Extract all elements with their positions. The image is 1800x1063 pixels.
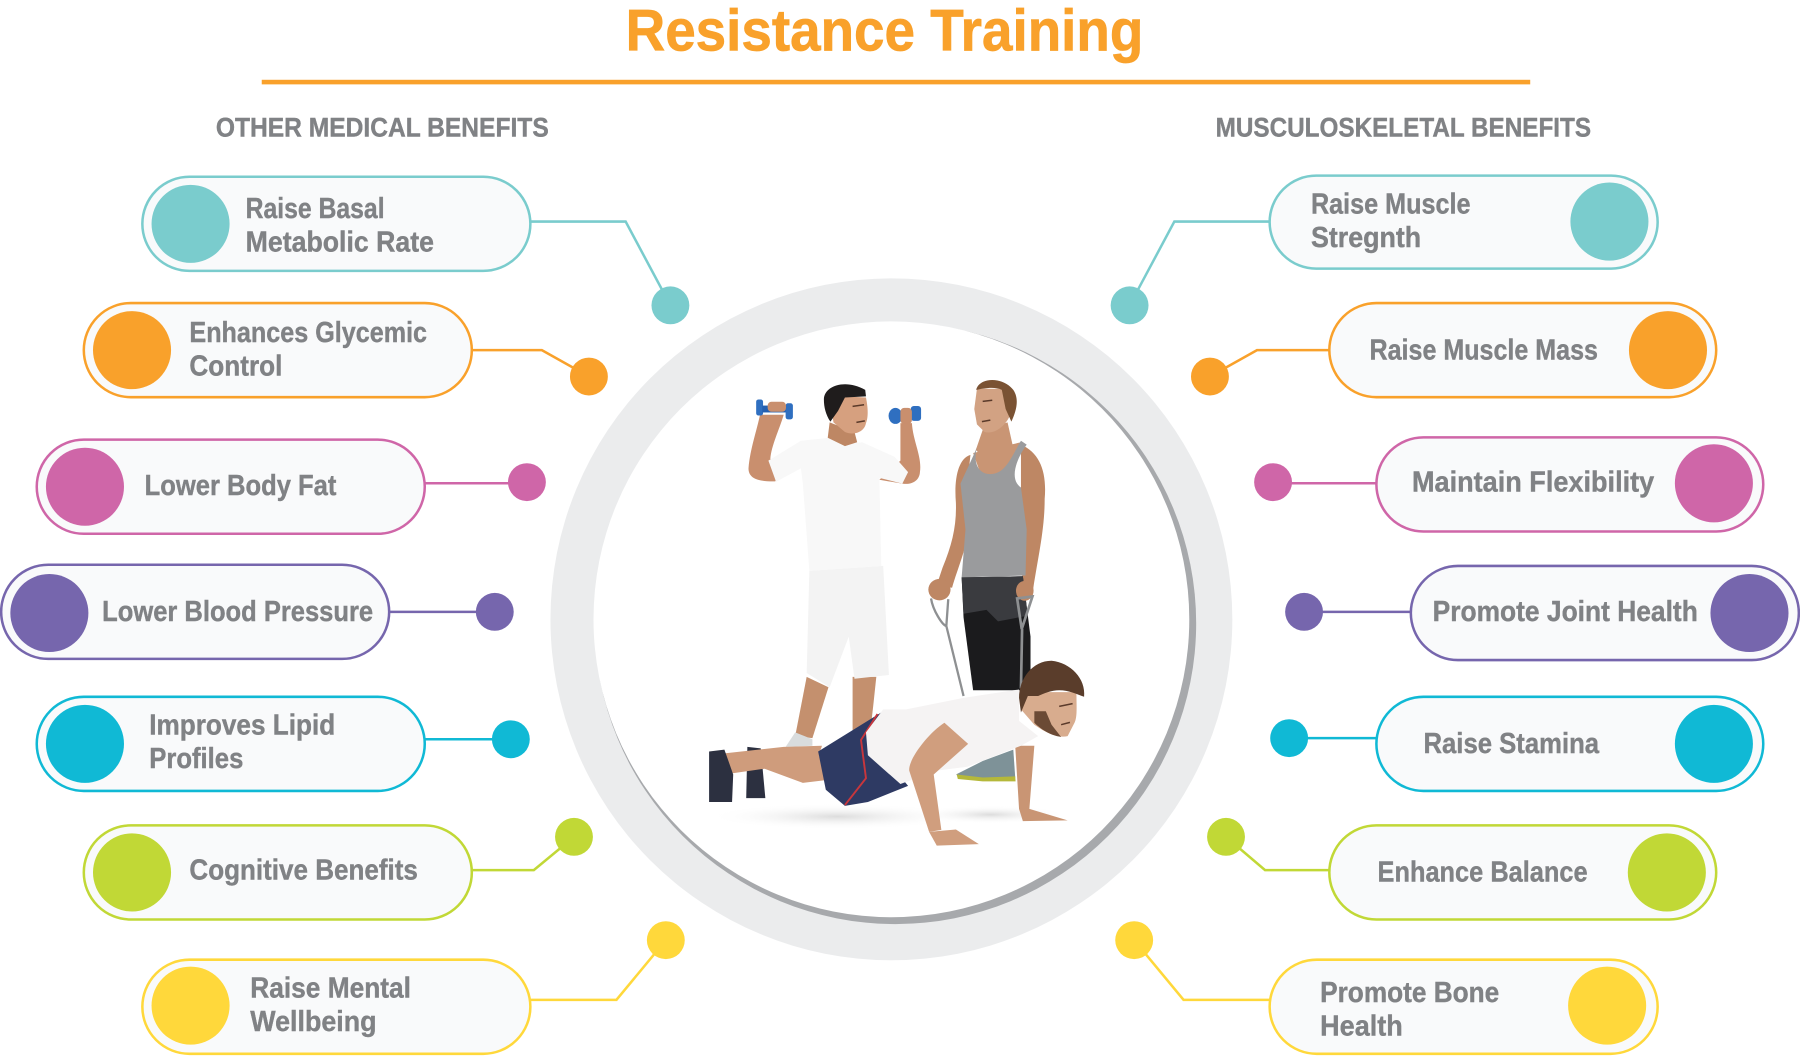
benefit: Raise Stamina (1270, 697, 1763, 791)
benefit: Promote Joint Health: Promote Joint Health (1433, 596, 1698, 628)
benefit: Raise Mental Wellbeing (142, 921, 685, 1054)
benefit: Raise Basal Metabolic Rate: Raise Basal (246, 193, 385, 225)
benefit: Lower Blood Pressure: Lower Blood Pressure (102, 596, 373, 628)
benefit: Improves Lipid Profiles: Profiles (149, 743, 243, 775)
title: Resistance Training (626, 0, 1143, 64)
benefit: Promote Bone Health: Promote Bone (1320, 977, 1499, 1009)
benefit: Cognitive Benefits (84, 818, 593, 920)
title underline (262, 80, 1530, 84)
benefit: Enhance Balance: Enhance Balance (1378, 857, 1588, 889)
benefit: Raise Muscle Stregnth (1111, 176, 1658, 324)
illustration: people exercising (707, 380, 1084, 846)
benefit: Promote Bone Health (1115, 921, 1658, 1054)
benefit: Promote Joint Health (1285, 566, 1799, 660)
benefit: Raise Mental Wellbeing: Wellbeing (250, 1006, 377, 1038)
benefit: Raise Basal Metabolic Rate (142, 177, 689, 324)
benefit: Raise Muscle Stregnth: Raise Muscle (1311, 189, 1471, 221)
central ring (550, 278, 1232, 960)
man with dumbbells (749, 384, 921, 747)
benefit: Raise Stamina: Raise Stamina (1423, 728, 1600, 760)
benefit: Enhances Glycemic Control: Control (189, 350, 282, 382)
benefit: Raise Muscle Mass (1191, 303, 1716, 397)
benefit: Maintain Flexibility (1254, 437, 1763, 532)
man doing push-up (707, 661, 1084, 846)
benefit: Lower Body Fat: Lower Body Fat (145, 470, 337, 502)
man with resistance band (928, 380, 1045, 781)
benefit: Raise Basal Metabolic Rate: Metabolic Rate (246, 226, 434, 258)
benefit: Promote Bone Health: Health (1320, 1010, 1403, 1042)
benefit: Lower Body Fat (37, 440, 546, 534)
benefit: Maintain Flexibility: Maintain Flexibility (1412, 466, 1654, 498)
benefit: Raise Mental Wellbeing: Raise Mental (250, 973, 411, 1005)
benefit: Improves Lipid Profiles: Improves Lipid (149, 710, 335, 742)
benefit: Raise Muscle Stregnth: Stregnth (1311, 222, 1421, 254)
heading: other medical benefits: OTHER MEDICAL BENEFITS (216, 113, 549, 143)
benefit: Enhances Glycemic Control (84, 303, 608, 397)
benefit: Lower Blood Pressure (1, 565, 514, 659)
benefit: Raise Muscle Mass: Raise Muscle Mass (1370, 334, 1598, 366)
benefit: Enhances Glycemic Control: Enhances Glycemic (189, 317, 427, 349)
benefit: Cognitive Benefits: Cognitive Benefits (189, 854, 418, 886)
benefit: Improves Lipid Profiles (37, 697, 530, 791)
benefit: Enhance Balance (1207, 818, 1716, 920)
heading: musculoskeletal benefits: MUSCULOSKELETAL BENEFITS (1216, 113, 1591, 143)
